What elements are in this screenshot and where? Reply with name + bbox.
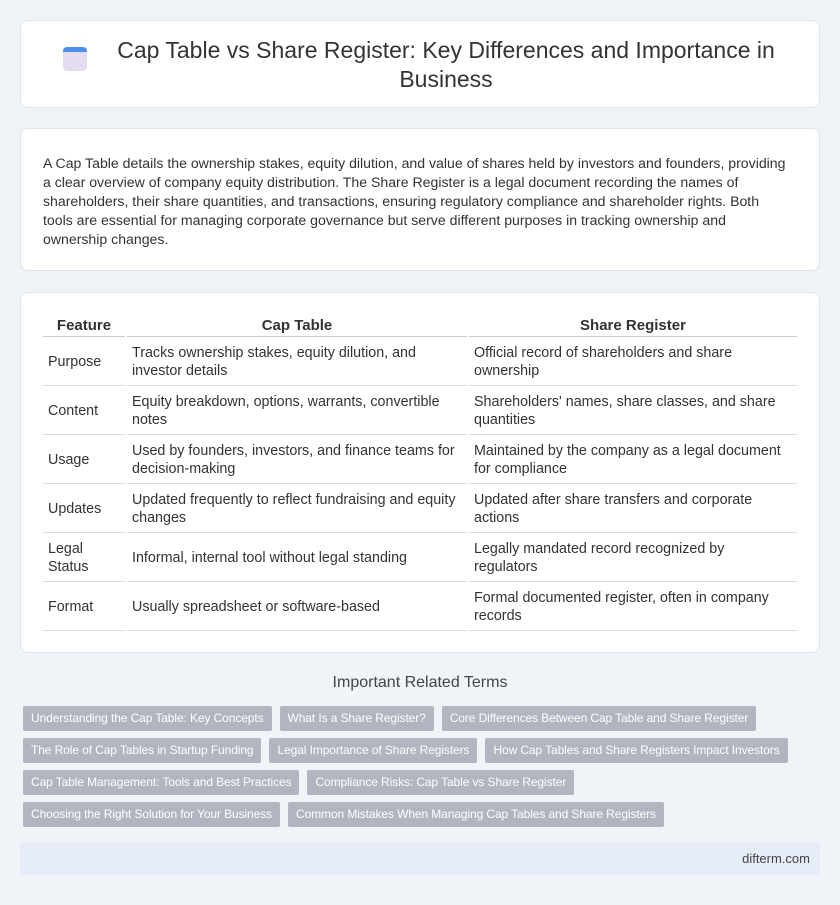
comparison table: Purpose bbox=[48, 354, 101, 370]
related terms tags: What Is a Share Register? bbox=[288, 711, 426, 725]
intro text: A Cap Table details the ownership stakes, equity dilution, and value of shares held by investors and founders, providing bbox=[43, 155, 785, 171]
comparison table: regulators bbox=[474, 559, 538, 575]
comparison table: Used by founders, investors, and finance teams for decision-making bbox=[132, 443, 455, 477]
intro text: tools are essential for managing corporate governance but serve different purposes in tracking ownership and bbox=[43, 212, 726, 228]
comparison table card bbox=[20, 292, 820, 653]
comparison table: Updates bbox=[48, 501, 101, 517]
footer: difterm.com bbox=[742, 851, 810, 866]
comparison table: Feature bbox=[57, 317, 111, 334]
related terms tags: Core Differences Between Cap Table and Share Register bbox=[450, 711, 748, 725]
comparison table: Updated after share transfers and corporate actions bbox=[474, 492, 752, 526]
comparison table: Updated frequently to reflect fundraising and equity changes bbox=[132, 492, 455, 526]
comparison table: Shareholders' names, share classes, and share quantities bbox=[474, 394, 776, 428]
intro card bbox=[20, 128, 820, 271]
comparison table: Format bbox=[48, 599, 93, 615]
title: Cap Table vs Share Register: Key Differences and Importance in Business bbox=[117, 37, 775, 92]
comparison table: Legally mandated record recognized by bbox=[474, 541, 724, 557]
intro text: a clear overview of company equity distribution. The Share Register is a legal document recording the names of bbox=[43, 174, 738, 190]
comparison table: Tracks ownership stakes, equity dilution, and investor details bbox=[132, 345, 416, 379]
header card bbox=[20, 20, 820, 108]
related terms tags: Choosing the Right Solution for Your Business bbox=[31, 807, 272, 821]
icon: calendar bbox=[63, 47, 87, 71]
footer bbox=[20, 842, 820, 875]
comparison table bbox=[43, 317, 797, 631]
comparison table: Equity breakdown, options, warrants, convertible notes bbox=[132, 394, 440, 428]
comparison table: Informal, internal tool without legal standing bbox=[132, 550, 407, 566]
related terms heading: Important Related Terms bbox=[333, 674, 507, 691]
comparison table: Official record of shareholders and share ownership bbox=[474, 345, 732, 379]
related terms tags: Common Mistakes When Managing Cap Tables and Share Registers bbox=[296, 807, 656, 821]
intro text bbox=[43, 155, 785, 247]
related terms tags: Understanding the Cap Table: Key Concepts bbox=[31, 711, 264, 725]
related terms tags: Compliance Risks: Cap Table vs Share Register bbox=[315, 775, 566, 789]
comparison table: Cap Table bbox=[262, 317, 332, 334]
related terms tags: Cap Table Management: Tools and Best Practices bbox=[31, 775, 291, 789]
intro text: ownership changes. bbox=[43, 231, 168, 247]
comparison table: Legal Status bbox=[48, 541, 89, 575]
comparison table: Usually spreadsheet or software-based bbox=[132, 599, 380, 615]
related terms tags: Legal Importance of Share Registers bbox=[277, 743, 469, 757]
comparison table: Usage bbox=[48, 452, 89, 468]
related terms tags: How Cap Tables and Share Registers Impact Investors bbox=[493, 743, 780, 757]
comparison table: Content bbox=[48, 403, 98, 419]
related terms tags: The Role of Cap Tables in Startup Funding bbox=[31, 743, 253, 757]
intro text: shareholders, their share quantities, and transactions, ensuring regulatory compliance and shareholder rights. Both bbox=[43, 193, 759, 209]
comparison table: Formal documented register, often in company records bbox=[474, 590, 769, 624]
comparison table: Share Register bbox=[580, 317, 686, 334]
comparison table: Maintained by the company as a legal document for compliance bbox=[474, 443, 781, 477]
